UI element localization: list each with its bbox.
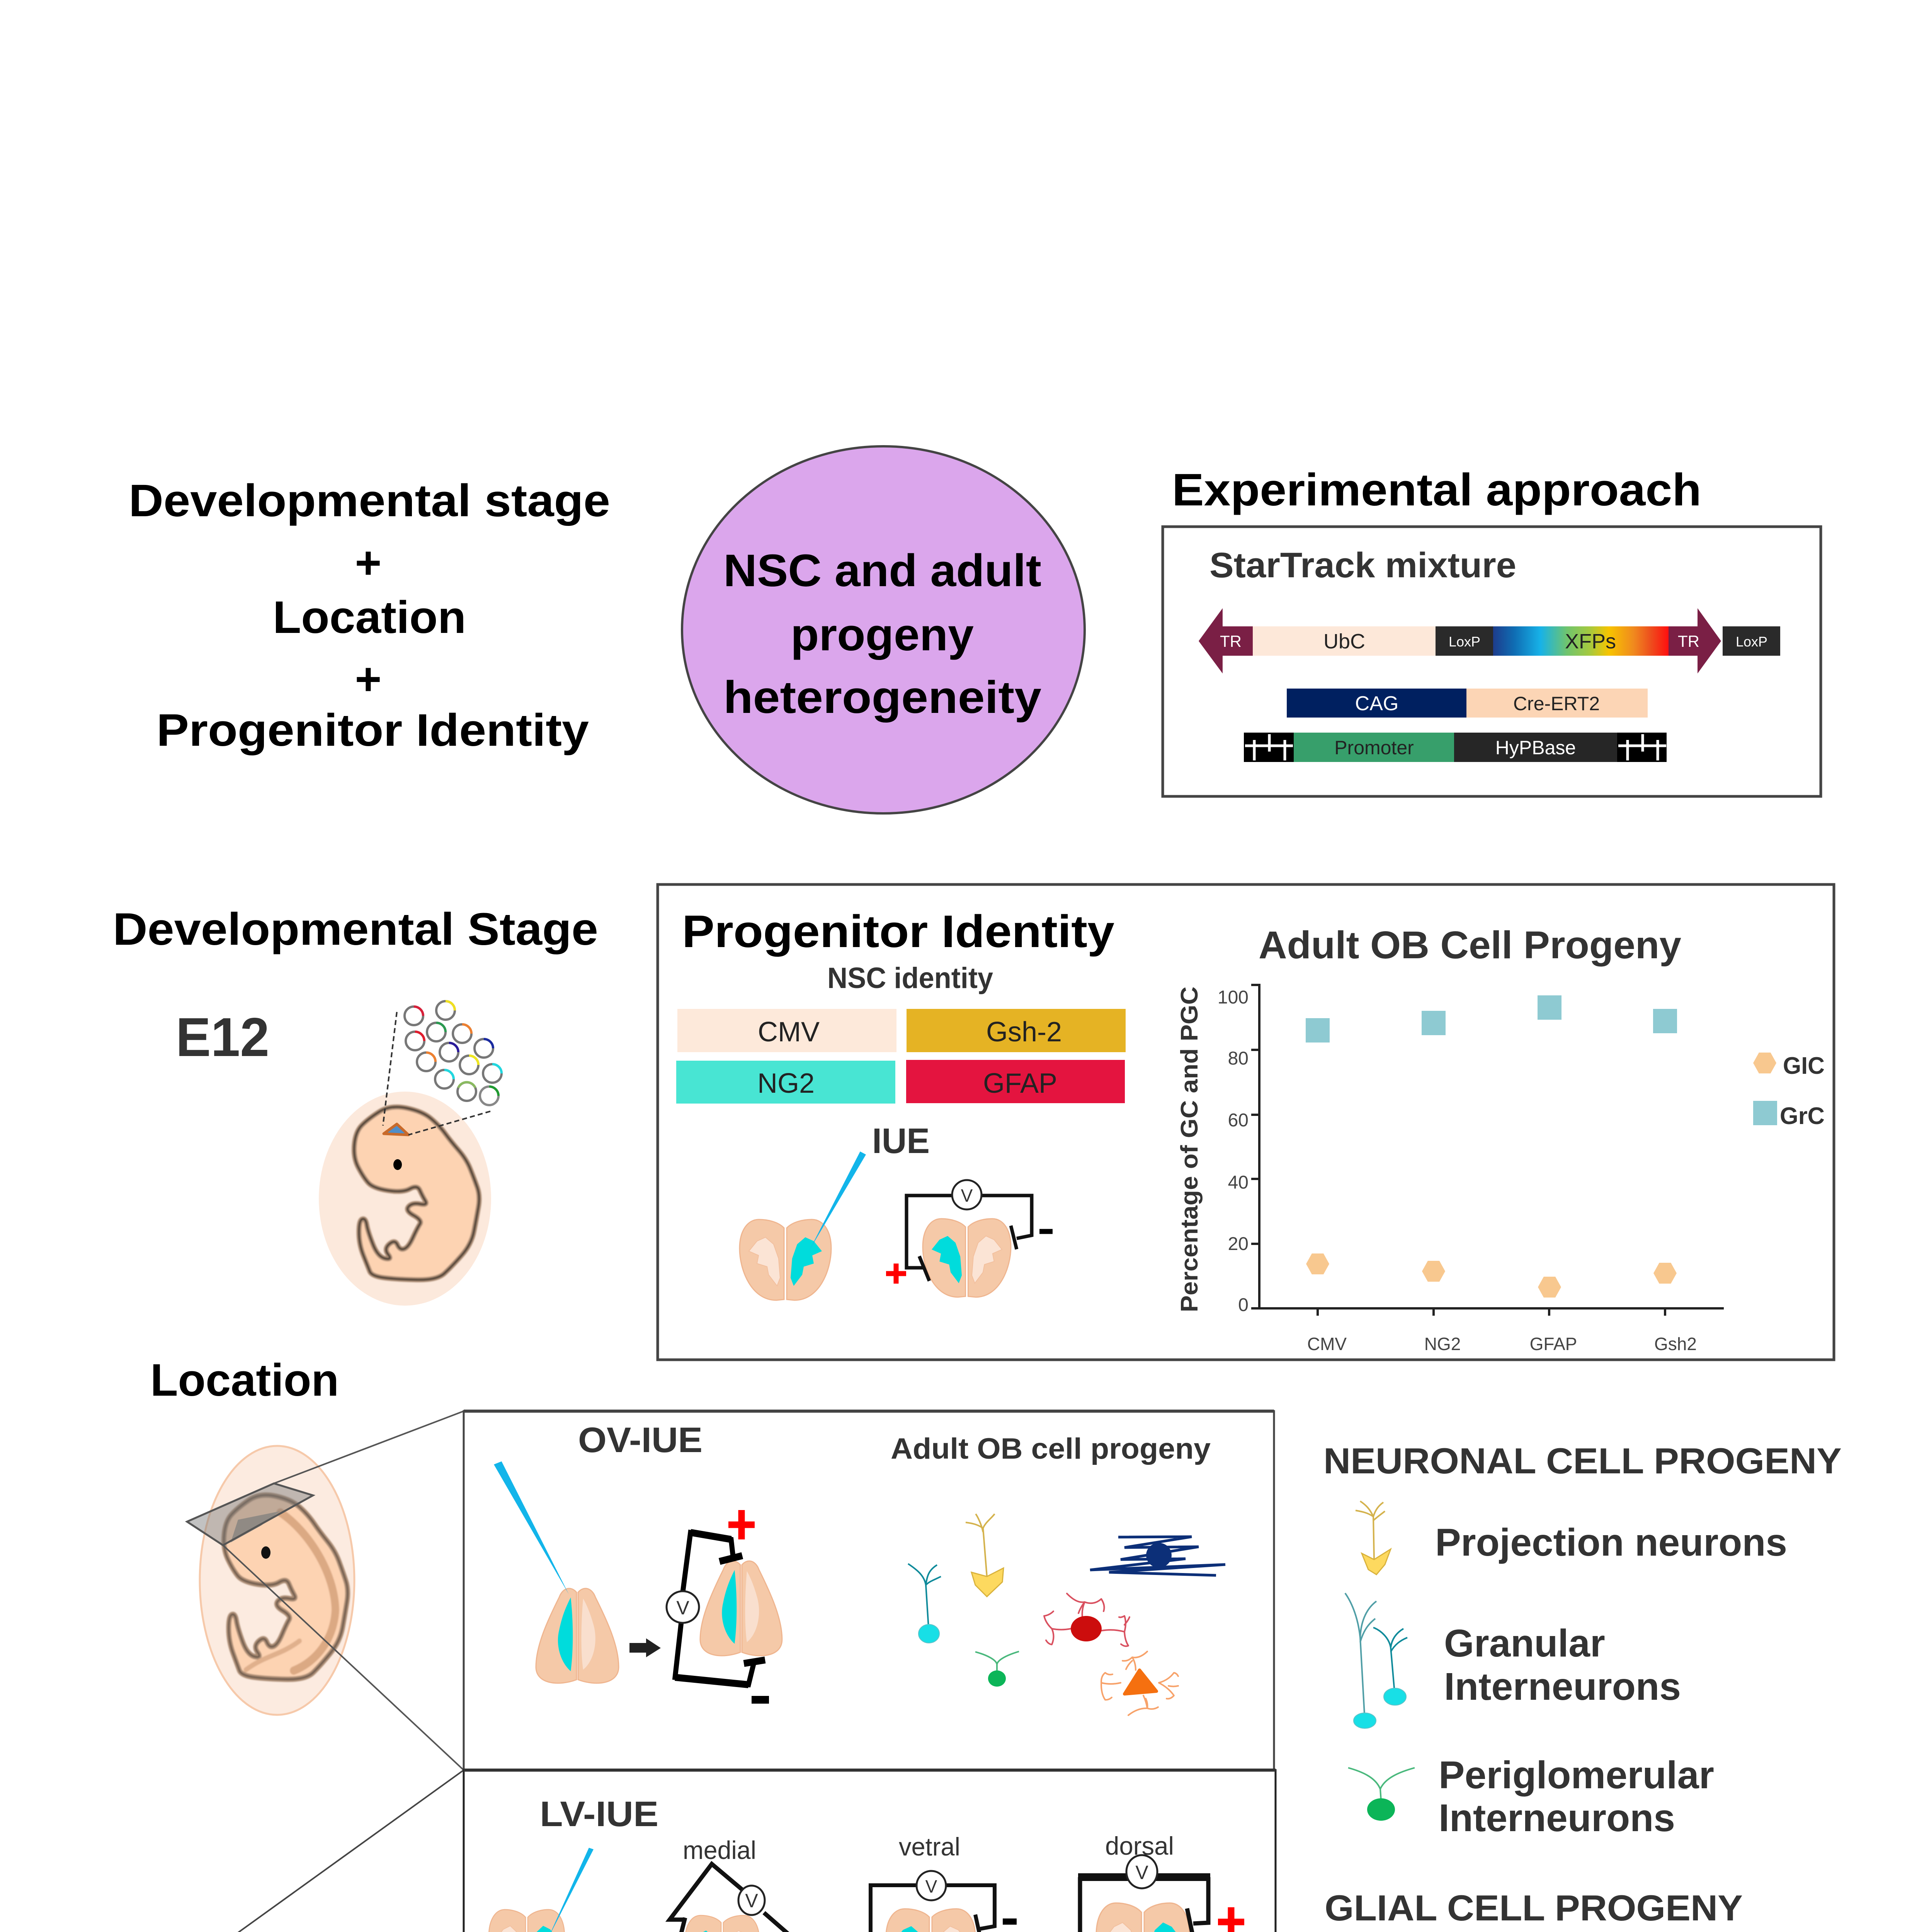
construct row 1: TR — [1220, 632, 1242, 650]
legend item: granular interneurons: Interneurons — [1444, 1665, 1681, 1708]
construct row 1: LoxP — [1736, 634, 1767, 650]
ventral electroporation: vetral — [899, 1832, 960, 1861]
result ellipse: heterogeneity — [723, 672, 1041, 723]
construct row 2 — [1287, 689, 1648, 718]
heading: progenitor identity: Progenitor Identity — [682, 906, 1114, 957]
heading: LV-IUE: LV-IUE — [540, 1794, 658, 1834]
construct row 3: HyPBase — [1495, 737, 1576, 759]
chart legend — [1753, 1053, 1825, 1129]
y ticks — [1218, 987, 1249, 1315]
y ticks: 40 — [1228, 1172, 1249, 1193]
neuron: projection — [966, 1514, 1004, 1597]
legend item: granular interneurons: Granular — [1444, 1622, 1605, 1665]
x labels: CMV — [1307, 1334, 1347, 1354]
heading: adult OB cell progeny: Adult OB cell progeny — [891, 1432, 1211, 1465]
GlC points — [1306, 1253, 1677, 1298]
y ticks: 100 — [1218, 987, 1249, 1008]
brain with electrodes: V — [676, 1597, 689, 1619]
equation: factors: + — [355, 537, 381, 588]
panel: progenitor identity — [658, 884, 1834, 1360]
cell: oligodendrocyte — [1090, 1537, 1225, 1575]
brain with pipette — [740, 1151, 866, 1300]
ventral electroporation — [849, 1832, 1017, 1932]
legend item: granular interneurons — [1345, 1593, 1681, 1728]
construct row 1: XFPs — [1565, 630, 1616, 653]
y ticks: 20 — [1228, 1234, 1249, 1254]
result ellipse: NSC and adult — [723, 545, 1041, 596]
subheading: NSC identity: NSC identity — [827, 962, 993, 995]
brain with electrodes — [667, 1510, 782, 1704]
legend item: periglomerular interneurons — [1348, 1753, 1714, 1840]
arrow — [629, 1638, 661, 1657]
label: IUE: IUE — [872, 1121, 930, 1161]
neuron: periglomerular — [975, 1651, 1019, 1687]
chart legend: GrC — [1780, 1103, 1825, 1129]
equation: factors — [129, 475, 610, 756]
promoter swatches: CMV — [758, 1017, 820, 1048]
legend item: periglomerular interneurons: Interneurons — [1439, 1796, 1675, 1840]
scatter chart — [1176, 985, 1724, 1354]
brain with pipette — [494, 1461, 619, 1683]
dorsal electroporation — [1057, 1832, 1244, 1932]
y ticks: 0 — [1238, 1295, 1249, 1315]
equation: factors: Progenitor Identity — [156, 705, 589, 756]
construct row 1: UbC — [1323, 630, 1365, 653]
panel: StarTrack mixture — [1163, 527, 1821, 796]
construct row 3: Promoter — [1334, 737, 1414, 759]
heading: location: Location — [150, 1355, 339, 1406]
plasmids — [405, 1001, 502, 1105]
x labels — [1307, 1334, 1697, 1354]
cell: astrocyte — [1044, 1594, 1129, 1646]
zoom lines — [383, 1012, 490, 1135]
legend: glial cell progeny: GLIAL CELL PROGENY — [1325, 1888, 1743, 1928]
result ellipse: progeny — [791, 609, 974, 660]
legend item: periglomerular interneurons: Periglomerular — [1439, 1753, 1714, 1797]
y ticks: 60 — [1228, 1110, 1249, 1131]
dorsal electroporation: dorsal — [1105, 1832, 1174, 1860]
construct row 2: Cre-ERT2 — [1513, 693, 1600, 714]
ventricle — [384, 1124, 408, 1135]
legend: neuronal cell progeny: NEURONAL CELL PROGENY — [1323, 1440, 1842, 1481]
heading: OV-IUE: OV-IUE — [578, 1420, 703, 1460]
legend: neuronal cell progeny — [1323, 1440, 1842, 1840]
GrC points — [1306, 995, 1677, 1043]
construct row 1: TR — [1678, 632, 1699, 650]
axes — [1251, 985, 1724, 1316]
panel: LV-IUE — [464, 1770, 1276, 1932]
embryo: OV section — [187, 1411, 464, 1770]
brain with pipette — [489, 1848, 594, 1932]
panel: OV-IUE — [464, 1411, 1274, 1770]
label: E12: E12 — [176, 1007, 269, 1068]
brain with electrodes — [886, 1180, 1053, 1297]
y axis label: Percentage of GC and PGC — [1176, 986, 1203, 1312]
x labels: GFAP — [1530, 1334, 1577, 1354]
equation: factors: Developmental stage — [129, 475, 610, 526]
chart legend: GIC — [1783, 1053, 1825, 1079]
brain with electrodes: V — [961, 1185, 973, 1206]
embryo: LV section — [156, 1770, 464, 1932]
medial electroporation: medial — [683, 1836, 756, 1864]
dorsal electroporation: V — [1135, 1862, 1148, 1883]
x labels: NG2 — [1424, 1334, 1461, 1354]
construct row 3 — [1244, 733, 1667, 762]
medial electroporation — [649, 1836, 804, 1932]
result ellipse — [682, 446, 1085, 813]
neuron: granular — [908, 1564, 941, 1643]
panel: StarTrack mixture: StarTrack mixture — [1209, 546, 1516, 585]
construct row 1: LoxP — [1449, 634, 1480, 650]
equation: factors: + — [355, 654, 381, 705]
ventral electroporation: V — [925, 1876, 937, 1896]
heading: experimental approach: Experimental approach — [1172, 464, 1701, 515]
embryo E12 with plasmids — [319, 1001, 502, 1306]
promoter swatches: NG2 — [757, 1068, 815, 1099]
equation: factors: Location — [273, 592, 466, 643]
promoter swatches: GFAP — [983, 1068, 1057, 1099]
promoter swatches: Gsh-2 — [986, 1017, 1062, 1048]
cell: NG-2 — [1101, 1651, 1178, 1715]
x labels: Gsh2 — [1654, 1334, 1697, 1354]
legend item: projection neurons — [1356, 1501, 1787, 1575]
chart title: Adult OB Cell Progeny — [1259, 923, 1681, 967]
eye — [393, 1159, 402, 1170]
construct row 2: CAG — [1355, 692, 1398, 715]
legend item: projection neurons: Projection neurons — [1435, 1521, 1787, 1564]
medial electroporation: V — [745, 1890, 758, 1912]
promoter swatches — [676, 1009, 1126, 1104]
construct row 1 — [1199, 608, 1780, 673]
embryo — [354, 1107, 479, 1280]
heading: developmental stage: Developmental Stage — [113, 904, 598, 955]
y ticks: 80 — [1228, 1048, 1249, 1069]
